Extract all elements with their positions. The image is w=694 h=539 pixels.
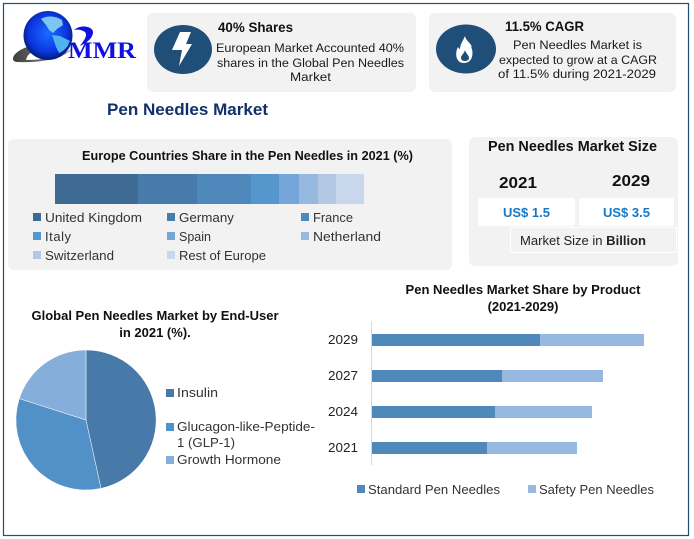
panel: Europe countries share [8, 139, 452, 270]
text: shares description: Market [290, 70, 332, 84]
heading: product chart title [406, 282, 641, 314]
value box 2021 [478, 198, 575, 226]
legend: countries: Italy [45, 229, 72, 244]
icon: flame [436, 24, 496, 74]
bar 2027: 2027 [328, 368, 358, 383]
legend: end-user: Growth Hormone [177, 452, 281, 467]
legend: end-user [166, 385, 315, 467]
logo: MMR globe: MMR [68, 38, 136, 63]
legend: countries: Rest of Europe [179, 248, 266, 263]
title: Pen Needles Market [107, 100, 268, 119]
bar 2024: 2024 [328, 404, 358, 419]
legend: countries: France [313, 210, 353, 225]
text: shares description: European Market Accounted 40% [216, 41, 404, 55]
text: CAGR description: Pen Needles Market is [513, 38, 642, 52]
text: shares description: shares in the Global Pen Needles [217, 56, 404, 70]
legend: countries: Germany [179, 210, 235, 225]
text: CAGR description: expected to grow at a CAGR [499, 53, 657, 67]
text: shares description [216, 41, 404, 84]
heading: market size: Pen Needles Market Size [488, 139, 657, 155]
pie chart [16, 350, 156, 490]
legend: countries: Netherland [313, 229, 381, 244]
bar 2027 [328, 368, 603, 383]
text: CAGR description: of 11.5% during 2021-2029 [498, 67, 656, 81]
bar 2029 [328, 332, 644, 347]
heading: end-user pie title: Global Pen Needles Market by End-User [32, 308, 278, 323]
bar 2021 [328, 440, 577, 455]
legend: countries: United Kingdom [45, 210, 142, 225]
unit note [510, 228, 676, 252]
bar 2024 [328, 404, 592, 419]
logo: MMR globe [13, 11, 136, 63]
legend: countries [33, 210, 381, 263]
legend: product: Safety Pen Needles [539, 482, 654, 497]
icon: lightning bolt [154, 25, 212, 74]
legend: end-user: Glucagon-like-Peptide- [177, 419, 315, 434]
value box 2029: US$ 3.5 [603, 205, 650, 220]
legend: product [357, 482, 654, 497]
heading: end-user pie title [32, 308, 278, 340]
stacked bar chart [55, 174, 364, 204]
legend: countries: Spain [179, 229, 211, 244]
year labels: 2021 [499, 175, 537, 192]
legend: end-user: Insulin [177, 385, 218, 400]
heading: product chart title: (2021-2029) [488, 299, 558, 314]
heading: 11.5% CAGR: 11.5% CAGR [505, 18, 584, 34]
value box 2021: US$ 1.5 [503, 205, 550, 220]
text: CAGR description [498, 38, 657, 81]
panel: 40% shares [147, 13, 416, 92]
heading: end-user pie title: in 2021 (%). [119, 325, 191, 340]
heading: Europe chart title: Europe Countries Share in the Pen Needles in 2021 (%) [82, 148, 413, 163]
panel: market size [469, 137, 678, 266]
bar chart: product share [328, 321, 644, 465]
unit note: Market Size in Billion [520, 233, 646, 248]
legend: end-user: 1 (GLP-1) [177, 435, 235, 450]
heading: 40% Shares: 40% Shares [218, 19, 293, 35]
panel: 11.5% CAGR [429, 13, 676, 92]
value box 2029 [579, 198, 674, 226]
year labels: 2029 [612, 173, 650, 190]
bar 2021: 2021 [328, 440, 358, 455]
bar 2029: 2029 [328, 332, 358, 347]
heading: product chart title: Pen Needles Market Share by Product [406, 282, 641, 297]
legend: product: Standard Pen Needles [368, 482, 501, 497]
legend: countries: Switzerland [45, 248, 114, 263]
year labels [499, 173, 650, 192]
